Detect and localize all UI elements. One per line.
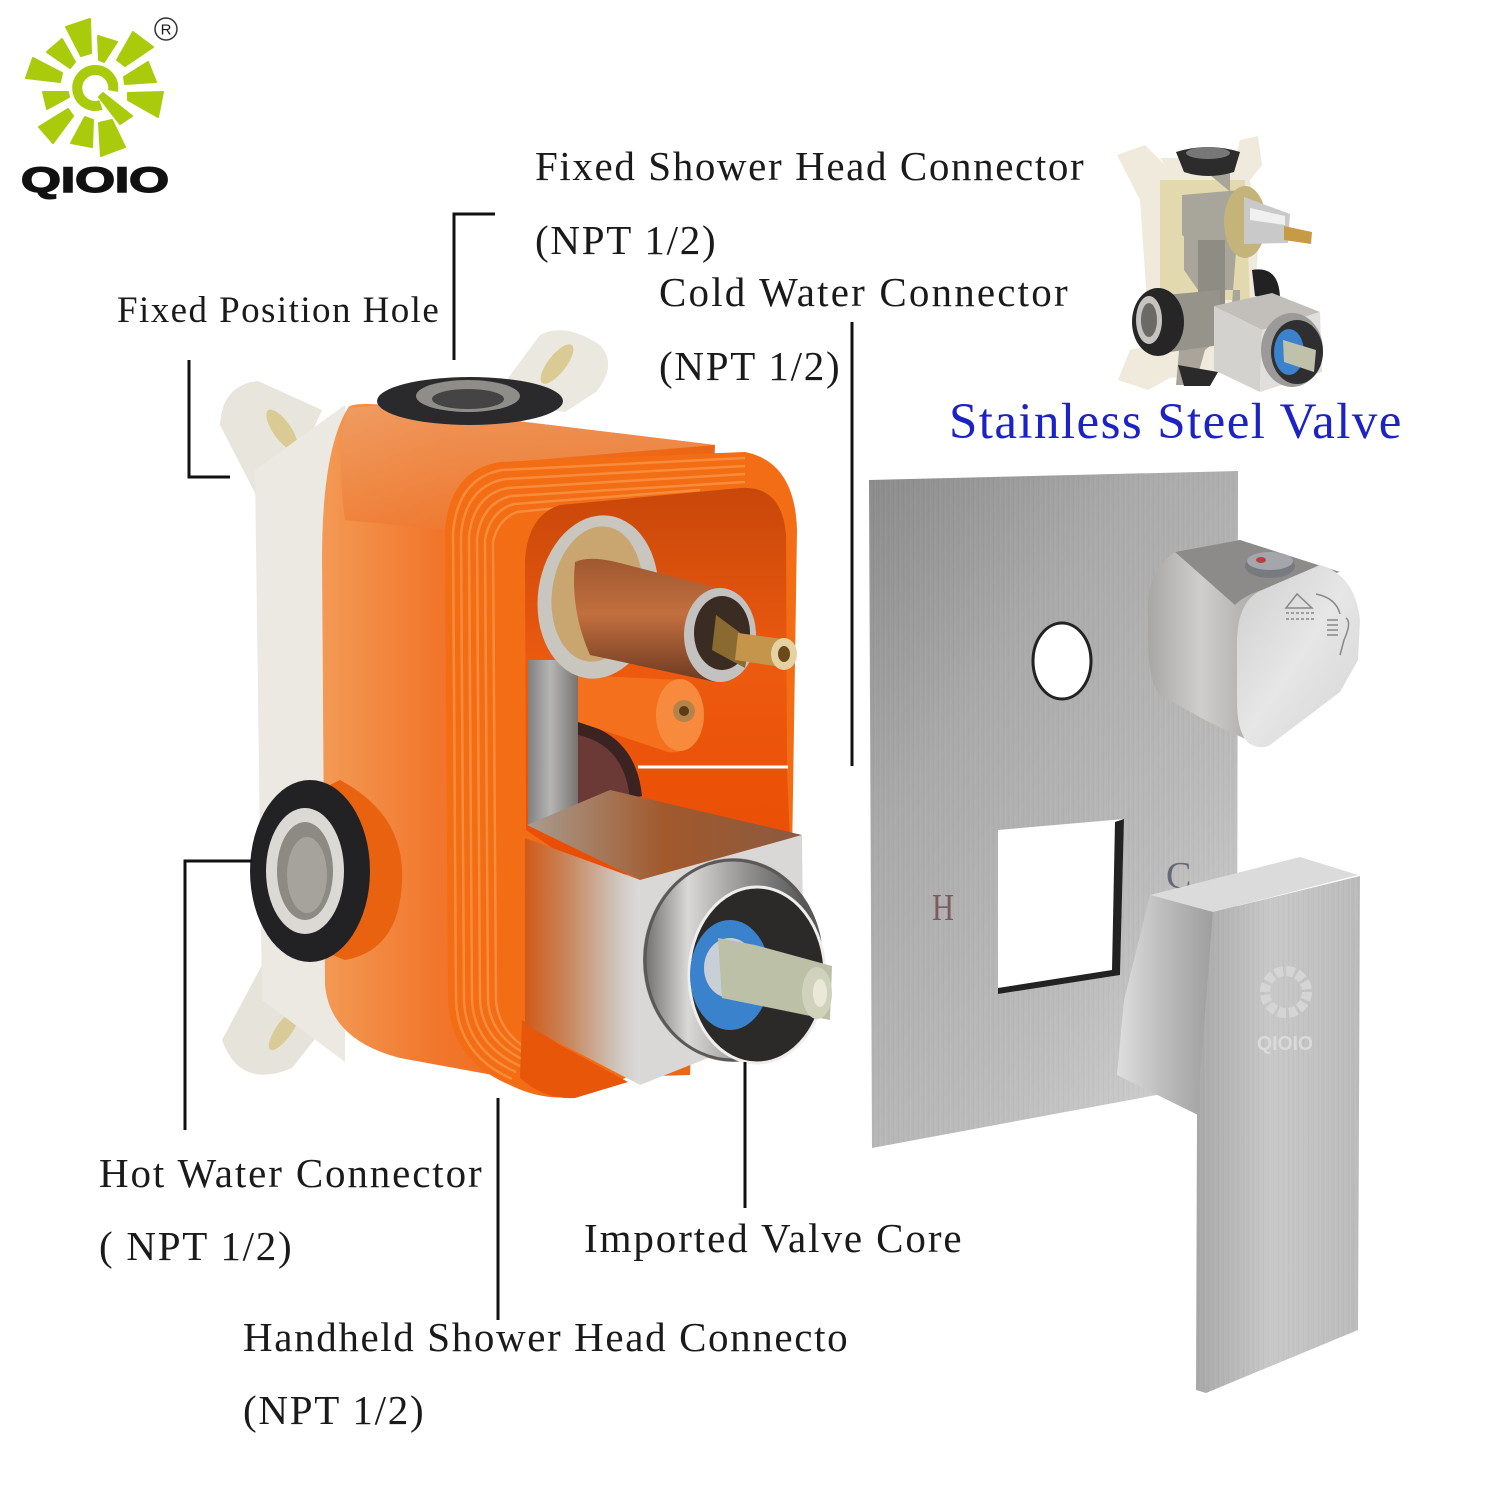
left connector bbox=[1132, 288, 1184, 356]
valve stem body bbox=[1176, 155, 1240, 385]
valve core cup bbox=[689, 887, 825, 1063]
shower icons bbox=[1286, 594, 1349, 655]
small orange post bbox=[578, 675, 702, 752]
leader: fixed shower head bbox=[454, 214, 495, 360]
square valve housing bbox=[527, 790, 802, 880]
label: fixed shower NPT: (NPT 1/2) bbox=[535, 217, 717, 263]
bottom nut bbox=[1178, 365, 1218, 386]
knob side face bbox=[1148, 540, 1300, 747]
round diverter knob bbox=[1148, 540, 1360, 747]
label: cold water NPT: (NPT 1/2) bbox=[659, 343, 841, 389]
plate letter H: H bbox=[932, 887, 954, 929]
brass seat and copper pipe bbox=[527, 507, 669, 687]
engraved logo on lever: QIOIO bbox=[1257, 1033, 1313, 1055]
side hot water connector bbox=[320, 780, 402, 960]
indicator cap bbox=[1245, 554, 1295, 578]
plate letter C: C bbox=[1166, 855, 1191, 897]
heading: Stainless Steel Valve: Stainless Steel Valve bbox=[949, 394, 1403, 450]
label: Cold Water Connector: Cold Water Connector bbox=[659, 269, 1069, 315]
leader: valve core bbox=[744, 1062, 746, 1208]
logo: QIOIO brand mark bbox=[21, 18, 177, 200]
handle lever bbox=[1117, 857, 1360, 1393]
leader lines bbox=[185, 214, 852, 1320]
top connector bbox=[377, 377, 563, 425]
label: Fixed Position Hole: Fixed Position Hole bbox=[117, 290, 440, 331]
valve box with orange housing bbox=[220, 330, 832, 1098]
dark elbow bbox=[578, 722, 642, 812]
label: Imported Valve Core: Imported Valve Core bbox=[584, 1215, 963, 1261]
label: handheld NPT: (NPT 1/2) bbox=[243, 1387, 425, 1433]
brushed steel cover plate bbox=[869, 471, 1238, 1148]
registered mark bbox=[155, 18, 177, 40]
white back body bbox=[255, 405, 345, 1062]
white frame bbox=[1117, 136, 1262, 390]
round hole bbox=[1033, 623, 1091, 699]
beige inner bbox=[1160, 180, 1250, 300]
orange body bbox=[322, 404, 715, 1080]
stem bbox=[528, 660, 578, 825]
top nut bbox=[1176, 147, 1240, 176]
valve core dome bbox=[643, 858, 823, 1062]
square hole bbox=[998, 819, 1124, 994]
wordmark: QIOIO bbox=[21, 161, 169, 200]
engraved logo on lever bbox=[1257, 971, 1313, 1055]
knob front face bbox=[1237, 565, 1360, 747]
label: Handheld Shower Head Connecto: Handheld Shower Head Connecto bbox=[243, 1314, 849, 1360]
label: hot water NPT: ( NPT 1/2) bbox=[99, 1223, 293, 1269]
front orange ribbed frame bbox=[445, 452, 797, 1098]
knob top face bbox=[1175, 540, 1340, 605]
mounting ears bbox=[220, 381, 322, 495]
small stainless steel valve photo bbox=[1117, 136, 1323, 392]
leader: cold water white segment bbox=[638, 766, 788, 768]
leader: cold water bbox=[850, 322, 854, 766]
square housing bbox=[1214, 293, 1320, 330]
top face of housing bbox=[341, 405, 715, 530]
rear dark connector bbox=[1252, 269, 1280, 300]
recessed inner cavity bbox=[525, 488, 790, 880]
lower inner rim bbox=[520, 1020, 628, 1098]
brass seat and chrome pipe bbox=[1224, 186, 1266, 258]
leader: handheld bbox=[496, 1098, 500, 1320]
leader: fixed position hole bbox=[189, 360, 230, 477]
icon: green sunburst bbox=[26, 19, 163, 156]
label: Fixed Shower Head Connector: Fixed Shower Head Connector bbox=[535, 143, 1085, 189]
leader: hot water bbox=[185, 861, 252, 1130]
label: Hot Water Connector: Hot Water Connector bbox=[99, 1150, 483, 1196]
registered mark: R bbox=[161, 22, 172, 38]
